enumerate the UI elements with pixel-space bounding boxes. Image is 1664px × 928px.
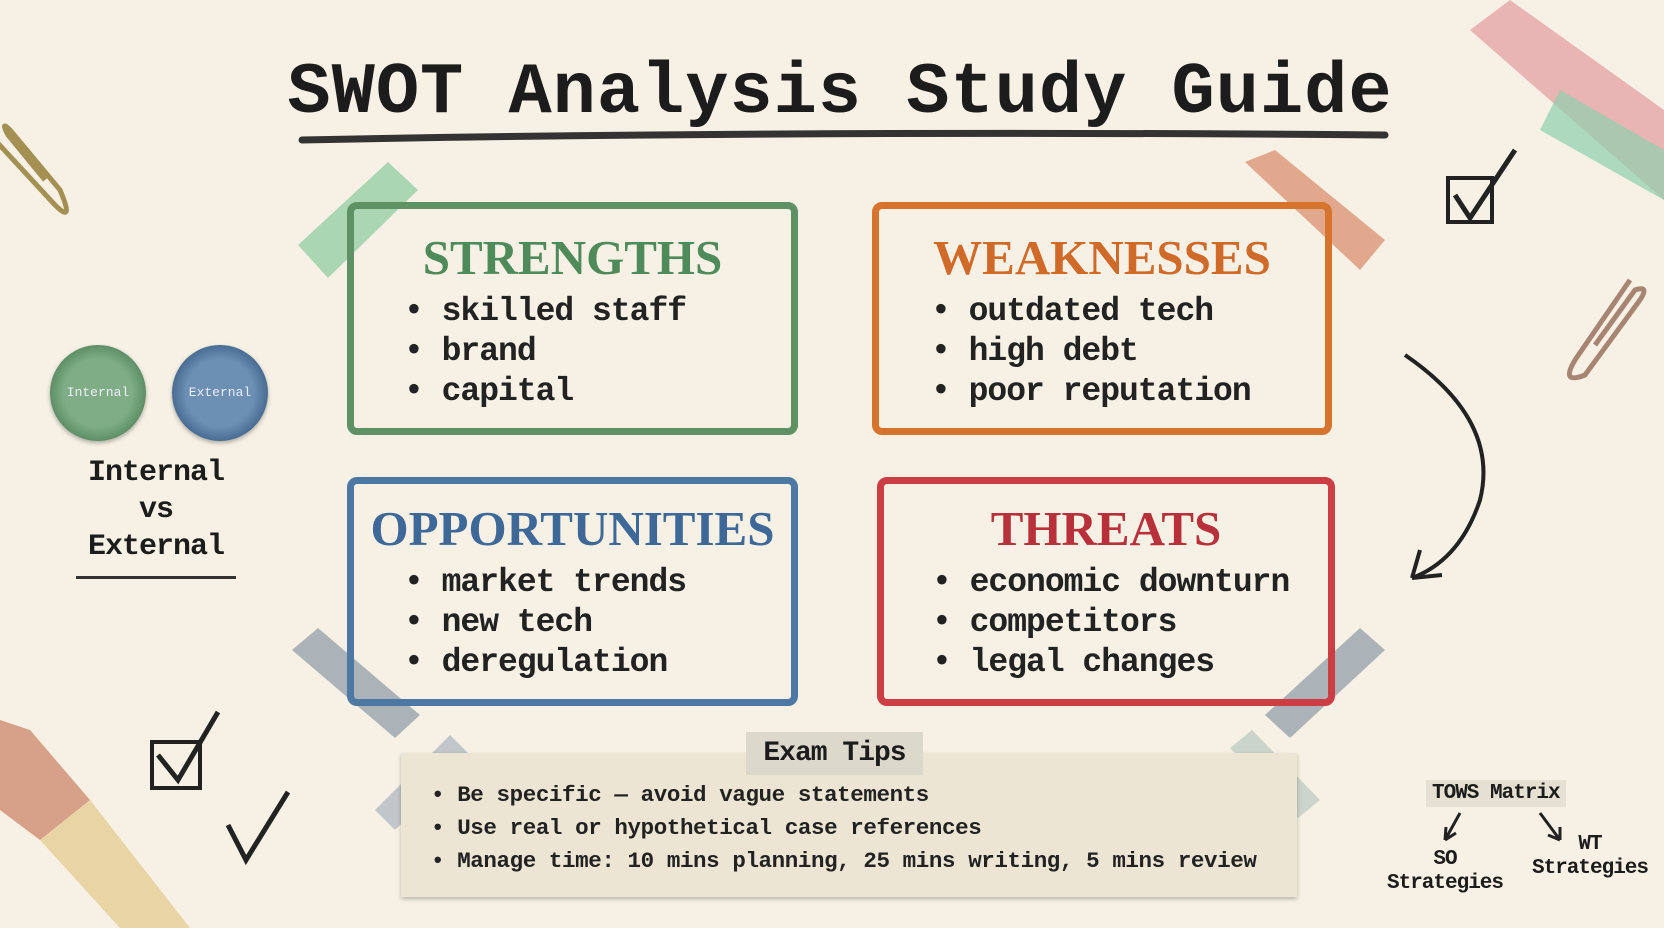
heading: strengths: STRENGTHS: [423, 230, 722, 285]
icon: paperclip right: [1569, 280, 1644, 378]
icon: external seal: External: [189, 385, 251, 400]
list: strengths: [404, 293, 686, 410]
label: exam tips: Exam Tips: [763, 738, 906, 769]
list: threats: • legal changes: [932, 644, 1214, 681]
icon: internal seal: Internal: [67, 385, 129, 400]
list: weaknesses: • high debt: [931, 333, 1138, 370]
list: strengths: • capital: [404, 373, 573, 410]
label: WT strategies: [1532, 833, 1648, 880]
list: exam tips: • Manage time: 10 mins planning, 25 mins writing, 5 mins review: [431, 848, 1256, 874]
tape: top right: [1470, 0, 1664, 200]
heading: opportunities: OPPORTUNITIES: [371, 501, 774, 556]
icon: internal seal: [50, 345, 146, 441]
icon: checkmark bottom left: [228, 792, 288, 860]
icon: external seal: [172, 345, 268, 441]
tapes on boxes: [292, 150, 1385, 830]
label: WT strategies: Strategies: [1532, 857, 1648, 880]
label: WT strategies: WT: [1578, 833, 1602, 856]
title: SWOT Analysis Study Guide: [287, 52, 1393, 134]
panel: strengths: [347, 202, 798, 435]
list: strengths: • skilled staff: [404, 293, 686, 330]
list: exam tips: • Use real or hypothetical case references: [431, 815, 981, 841]
text: internal vs external: Internal: [88, 456, 224, 490]
panel: threats: [877, 477, 1335, 706]
list: weaknesses: [931, 293, 1251, 410]
label: exam tips: [746, 732, 923, 775]
panel: exam tips: [401, 753, 1297, 897]
title underline: [302, 133, 1385, 140]
list: threats: [932, 564, 1289, 681]
text: internal vs external: External: [88, 530, 224, 564]
list: opportunities: • new tech: [404, 604, 592, 641]
icon: checkmark left: [152, 712, 218, 788]
list: opportunities: • market trends: [404, 564, 686, 601]
list: exam tips: • Be specific — avoid vague statements: [431, 782, 929, 808]
label: SO strategies: SO: [1433, 848, 1457, 871]
label: tows matrix: TOWS Matrix: [1432, 782, 1560, 805]
icon: paperclip left: [0, 126, 66, 212]
panel: weaknesses: [872, 202, 1332, 435]
text: internal vs external: vs: [139, 493, 173, 527]
diagram: tows matrix: [1387, 780, 1648, 895]
list: threats: • economic downturn: [932, 564, 1289, 601]
list: exam tips: [431, 782, 1257, 874]
list: opportunities: [404, 564, 686, 681]
list: threats: • competitors: [932, 604, 1176, 641]
list: weaknesses: • poor reputation: [931, 373, 1251, 410]
arrow: curved: [1405, 355, 1483, 578]
tape: bottom left: [0, 720, 190, 928]
label: SO strategies: [1387, 848, 1503, 895]
list: weaknesses: • outdated tech: [931, 293, 1213, 330]
label: SO strategies: Strategies: [1387, 872, 1503, 895]
heading: threats: THREATS: [991, 501, 1221, 556]
list: opportunities: • deregulation: [404, 644, 667, 681]
heading: weaknesses: WEAKNESSES: [933, 230, 1271, 285]
panel: opportunities: [347, 477, 798, 706]
icon: checkmark top right: [1448, 150, 1515, 222]
list: strengths: • brand: [404, 333, 536, 370]
text: internal vs external: [76, 455, 236, 579]
